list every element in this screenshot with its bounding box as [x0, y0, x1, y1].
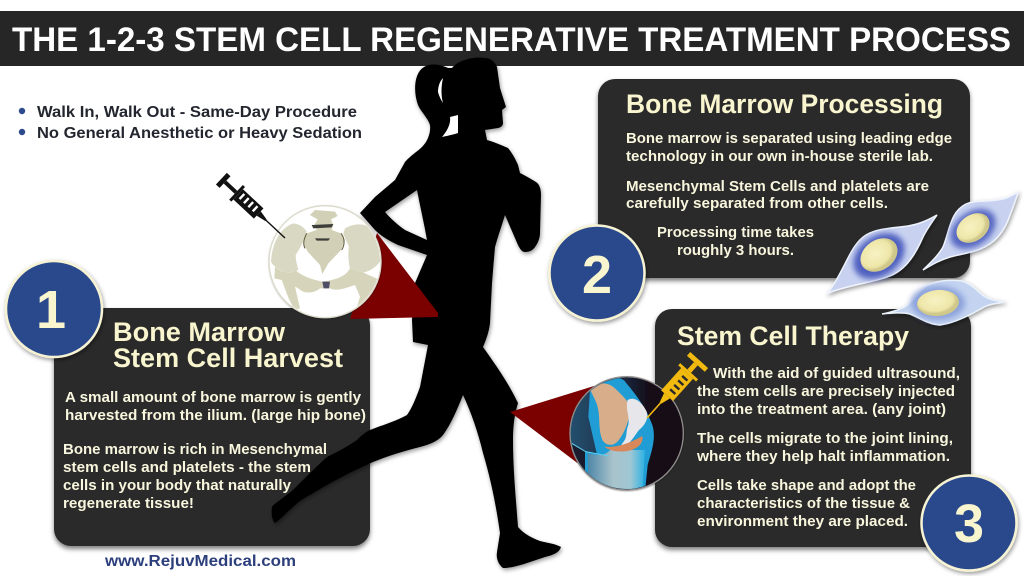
panel heading: processing: Bone Marrow Processing: [626, 89, 943, 119]
icon: yellow syringe: [638, 352, 708, 426]
processing text block: Bone marrow is separated using leading edge: [626, 131, 952, 147]
therapy text block: environment they are placed.: [697, 514, 908, 530]
harvest text block: regenerate tissue!: [63, 496, 194, 512]
pointer triangle: knee: [510, 386, 594, 468]
step badge 3: 3: [954, 494, 984, 554]
panel: bone marrow processing: [598, 79, 970, 278]
sacrum and vertebrae: [303, 210, 345, 274]
harvest text block: harvested from the ilium. (large hip bone): [65, 408, 366, 424]
processing text block: Mesenchymal Stem Cells and platelets are: [626, 179, 929, 195]
harvest text block: A small amount of bone marrow is gently: [65, 390, 361, 406]
panel: stem cell therapy: [655, 309, 971, 547]
icon: stem cell right: [923, 192, 1018, 270]
processing text block: [626, 131, 952, 259]
cartilage: [621, 399, 647, 449]
shin: [588, 450, 645, 492]
bullet list: [19, 104, 362, 142]
right ilium: [343, 224, 381, 273]
website url: www.RejuvMedical.com: [104, 553, 296, 570]
therapy text block: Cells take shape and adopt the: [697, 478, 916, 494]
bullet list: No General Anesthetic or Heavy Sedation: [37, 125, 362, 142]
harvest text block: Bone marrow is rich in Mesenchymal: [63, 442, 327, 458]
harvest text block: [63, 390, 366, 512]
therapy text block: With the aid of guided ultrasound,: [713, 366, 960, 382]
processing text block: technology in our own in-house sterile lab.: [626, 149, 933, 165]
therapy text block: The cells migrate to the joint lining,: [697, 431, 953, 447]
therapy text block: where they help halt inflammation.: [696, 449, 950, 465]
icon: black syringe: [215, 171, 292, 245]
white gaps around ponytail and neck: [438, 78, 458, 137]
left ilium: [271, 223, 307, 273]
panel heading: therapy: Stem Cell Therapy: [677, 321, 909, 351]
femur: [590, 383, 630, 445]
harvest text block: cells in your body that naturally: [63, 478, 291, 494]
step badge 1: 1: [36, 280, 66, 340]
meniscus: [604, 436, 643, 452]
panel heading: harvest: [113, 317, 343, 373]
processing text block: Processing time takes: [657, 225, 814, 241]
panel heading: harvest: Stem Cell Harvest: [113, 343, 343, 373]
pointer triangle: hip: [350, 233, 438, 319]
therapy text block: the stem cells are precisely injected: [697, 384, 955, 400]
step badge 3: [922, 476, 1016, 570]
title banner: THE 1-2-3 STEM CELL REGENERATIVE TREATMENT PROCESS: [12, 21, 1011, 59]
icon: pelvis skeleton circle: [269, 206, 381, 318]
icon: stem cell bottom: [882, 280, 1005, 325]
harvest text block: stem cells and platelets - the stem: [63, 460, 311, 476]
therapy text block: [696, 366, 960, 530]
panel: bone marrow stem cell harvest: [54, 308, 370, 546]
blue leg outline: [585, 378, 654, 492]
step badge 2: [550, 226, 644, 320]
icon: knee joint circle: [570, 377, 683, 492]
title banner: [0, 11, 1024, 66]
step badge 1: [6, 261, 102, 357]
bullet list: Walk In, Walk Out - Same-Day Procedure: [37, 104, 357, 121]
lower left dark region: [572, 444, 585, 470]
processing text block: carefully separated from other cells.: [626, 196, 888, 212]
pubis and hips: [274, 266, 378, 310]
processing text block: roughly 3 hours.: [677, 243, 794, 259]
therapy text block: into the treatment area. (any joint): [697, 402, 946, 418]
step badge 2: 2: [582, 245, 612, 305]
panel heading: harvest: Bone Marrow: [113, 317, 286, 347]
runner silhouette: [272, 58, 561, 568]
icon: stem cell left: [828, 215, 937, 293]
therapy text block: characteristics of the tissue &: [697, 496, 911, 512]
